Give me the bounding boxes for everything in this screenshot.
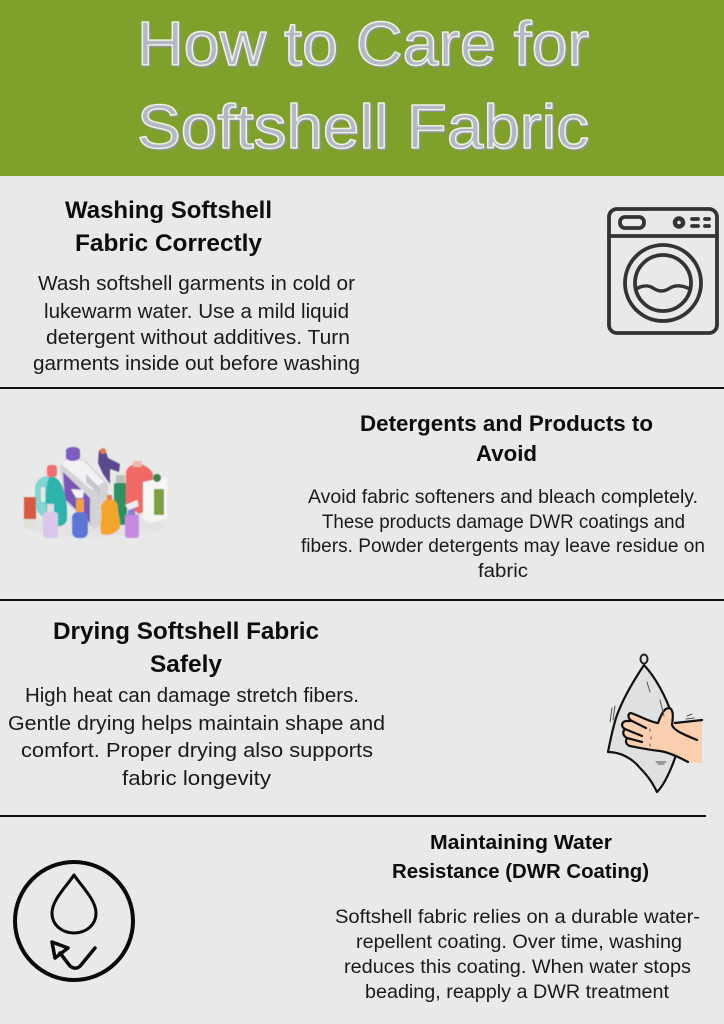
- text: drying: [8, 684, 385, 790]
- divider: [0, 387, 724, 389]
- heading: drying: Safely: [150, 651, 223, 678]
- icon: water drop and arrow: [15, 862, 133, 980]
- text: washing: [33, 272, 360, 375]
- text: water resistance: Softshell fabric relies on a durable water-: [335, 906, 700, 928]
- text: water resistance: beading, reapply a DWR treatment: [365, 981, 670, 1003]
- title: How to Care for: [137, 10, 589, 79]
- panel: water resistance: [15, 832, 700, 1003]
- heading: detergents: Avoid: [476, 441, 537, 466]
- heading: washing: [65, 197, 272, 257]
- icon: detergent bottles: [24, 447, 167, 538]
- heading: drying: Drying Softshell Fabric: [53, 618, 319, 645]
- text: water resistance: repellent coating. Over time, washing: [356, 931, 682, 953]
- text: detergents: fabric: [478, 561, 528, 582]
- text: water resistance: [335, 906, 700, 1003]
- divider: [0, 599, 724, 601]
- heading: washing: Fabric Correctly: [75, 230, 263, 257]
- icon: washing machine: [609, 209, 717, 333]
- text: drying: Gentle drying helps maintain shape and: [8, 712, 385, 735]
- text: water resistance: reduces this coating. When water stops: [344, 956, 691, 978]
- title: Softshell Fabric: [138, 94, 590, 164]
- panel: drying: [8, 618, 702, 792]
- text: washing: Wash softshell garments in cold or: [38, 272, 355, 295]
- text: drying: comfort. Proper drying also supports: [21, 739, 373, 762]
- text: detergents: Avoid fabric softeners and bleach completely.: [308, 487, 698, 508]
- title: Softshell Fabric: [137, 93, 589, 162]
- text: washing: lukewarm water. Use a mild liquid: [44, 300, 349, 323]
- heading: water resistance: Maintaining Water: [430, 832, 612, 854]
- title banner: [0, 0, 724, 176]
- heading: detergents: [360, 411, 653, 466]
- heading: detergents: Detergents and Products to: [360, 411, 653, 436]
- text: detergents: fibers. Powder detergents may leave residue on: [301, 536, 705, 557]
- divider: [0, 815, 706, 817]
- icon: hand drying towel: [608, 654, 702, 792]
- heading: water resistance: Resistance (DWR Coating): [392, 861, 649, 883]
- text: drying: High heat can damage stretch fibers.: [25, 684, 359, 707]
- title: [137, 10, 590, 164]
- heading: washing: Washing Softshell: [65, 197, 272, 224]
- panel: detergents: [24, 411, 705, 582]
- text: detergents: These products damage DWR coatings and: [322, 512, 685, 533]
- text: washing: detergent without additives. Turn: [46, 326, 350, 349]
- text: detergents: [301, 487, 705, 582]
- heading: water resistance: [392, 832, 649, 883]
- panel: washing: [33, 197, 717, 375]
- title: How to Care for: [138, 12, 590, 80]
- heading: drying: [53, 618, 319, 678]
- text: washing: garments inside out before washing: [33, 352, 360, 375]
- text: drying: fabric longevity: [122, 767, 272, 790]
